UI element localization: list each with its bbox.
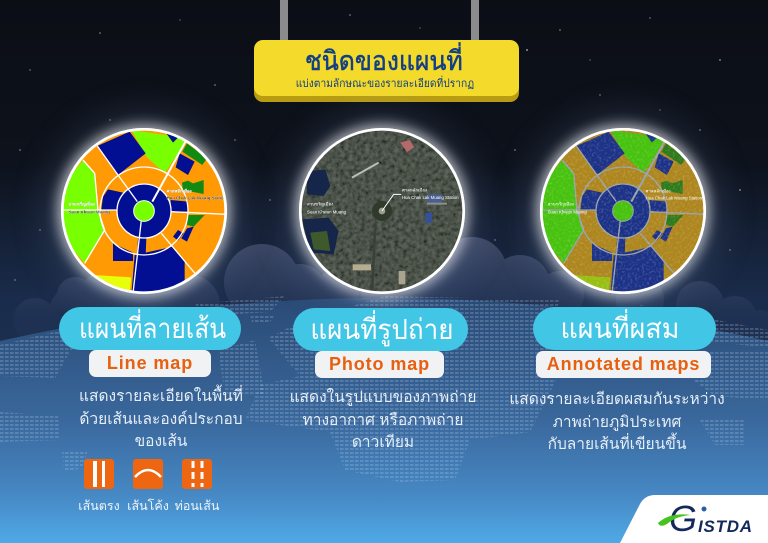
logo panel: GISTDA <box>620 495 768 543</box>
photo map labels <box>307 188 459 215</box>
icon: curved line <box>133 459 163 489</box>
description: annotated maps: กับลายเส้นที่เขียนขึ้น <box>548 436 686 453</box>
sublabel: annotated maps <box>536 351 711 378</box>
photo map labels: สวนขวัญเมือง <box>307 202 333 207</box>
map circle: line map <box>61 128 227 294</box>
subtitle: แบ่งตามลักษณะของรายละเอียดที่ปรากฏ <box>295 78 474 90</box>
map labels <box>69 188 227 215</box>
description: photo map: ทางอากาศ หรือภาพถ่าย <box>303 412 463 428</box>
photo map labels: Suan Khwan Muang <box>307 210 347 215</box>
logo text <box>669 498 752 539</box>
heading: annotated maps <box>533 307 716 350</box>
annotated map labels: Suan Khwan Muang <box>548 210 587 215</box>
heading: line map: แผนที่ลายเส้น <box>79 313 227 344</box>
sublabel: line map: Line map <box>107 353 193 373</box>
map labels: ศาลหลักเมือง <box>167 188 192 193</box>
icon label: line segments: ท่อนเส้น <box>175 499 219 513</box>
photo map labels: ศาลหลักเมือง <box>402 188 427 193</box>
sublabel: photo map <box>315 351 444 378</box>
icon: straight line <box>84 459 114 489</box>
map labels: Hua Chak Lak Muang Station <box>167 196 227 201</box>
sublabel: annotated maps: Annotated maps <box>547 354 700 374</box>
description: line map: แสดงรายละเอียดในพื้นที่ <box>79 388 243 405</box>
logo swoosh <box>658 514 691 526</box>
logo text: ISTDA <box>698 517 752 536</box>
description: line map: ด้วยเส้นและองค์ประกอบ <box>79 410 243 428</box>
hanging sign poles <box>280 0 479 40</box>
lakes and green areas <box>307 169 330 196</box>
description: annotated maps: แสดงรายละเอียดผสมกันระหว่าง <box>509 391 725 408</box>
annotated map labels: สวนขวัญเมือง <box>548 202 574 207</box>
heading: photo map: แผนที่รูปถ่าย <box>310 314 453 345</box>
description: photo map <box>290 388 476 451</box>
clouds <box>13 237 768 346</box>
icon label: straight line: เส้นตรง <box>78 499 120 513</box>
description: line map: ของเส้น <box>135 433 187 450</box>
map labels: สวนขวัญเมือง <box>69 202 95 208</box>
sublabel: photo map: Photo map <box>329 354 430 374</box>
logo text: G <box>669 498 697 539</box>
annotated map labels: ศาลหลักเมือง <box>646 188 671 193</box>
dotted world map <box>0 296 768 482</box>
title: ชนิดของแผนที่ <box>305 46 462 76</box>
icon: line segments <box>182 459 212 489</box>
icon label: curved line: เส้นโค้ง <box>127 499 169 513</box>
description: photo map: แสดงในรูปแบบของภาพถ่าย <box>290 389 476 406</box>
description: annotated maps: ภาพถ่ายภูมิประเทศ <box>553 414 681 430</box>
map circle: annotated map <box>540 128 706 294</box>
description: annotated maps <box>509 390 725 453</box>
heading: annotated maps: แผนที่ผสม <box>561 313 680 344</box>
sublabel: line map <box>89 350 211 377</box>
annotated map labels <box>548 188 703 215</box>
earth <box>0 298 768 543</box>
title sign <box>254 40 519 102</box>
photo map labels: Hua Chak Lak Muang Station <box>402 195 459 200</box>
map labels: Suan Khwan Muang <box>69 210 110 215</box>
heading: line map <box>59 307 241 350</box>
description: photo map: ดาวเทียม <box>352 434 414 451</box>
annotated map labels: Hua Chak Lak Muang Station <box>646 196 703 201</box>
heading: photo map <box>293 308 468 351</box>
map circle: photo map <box>299 128 465 294</box>
description: line map <box>79 384 243 450</box>
